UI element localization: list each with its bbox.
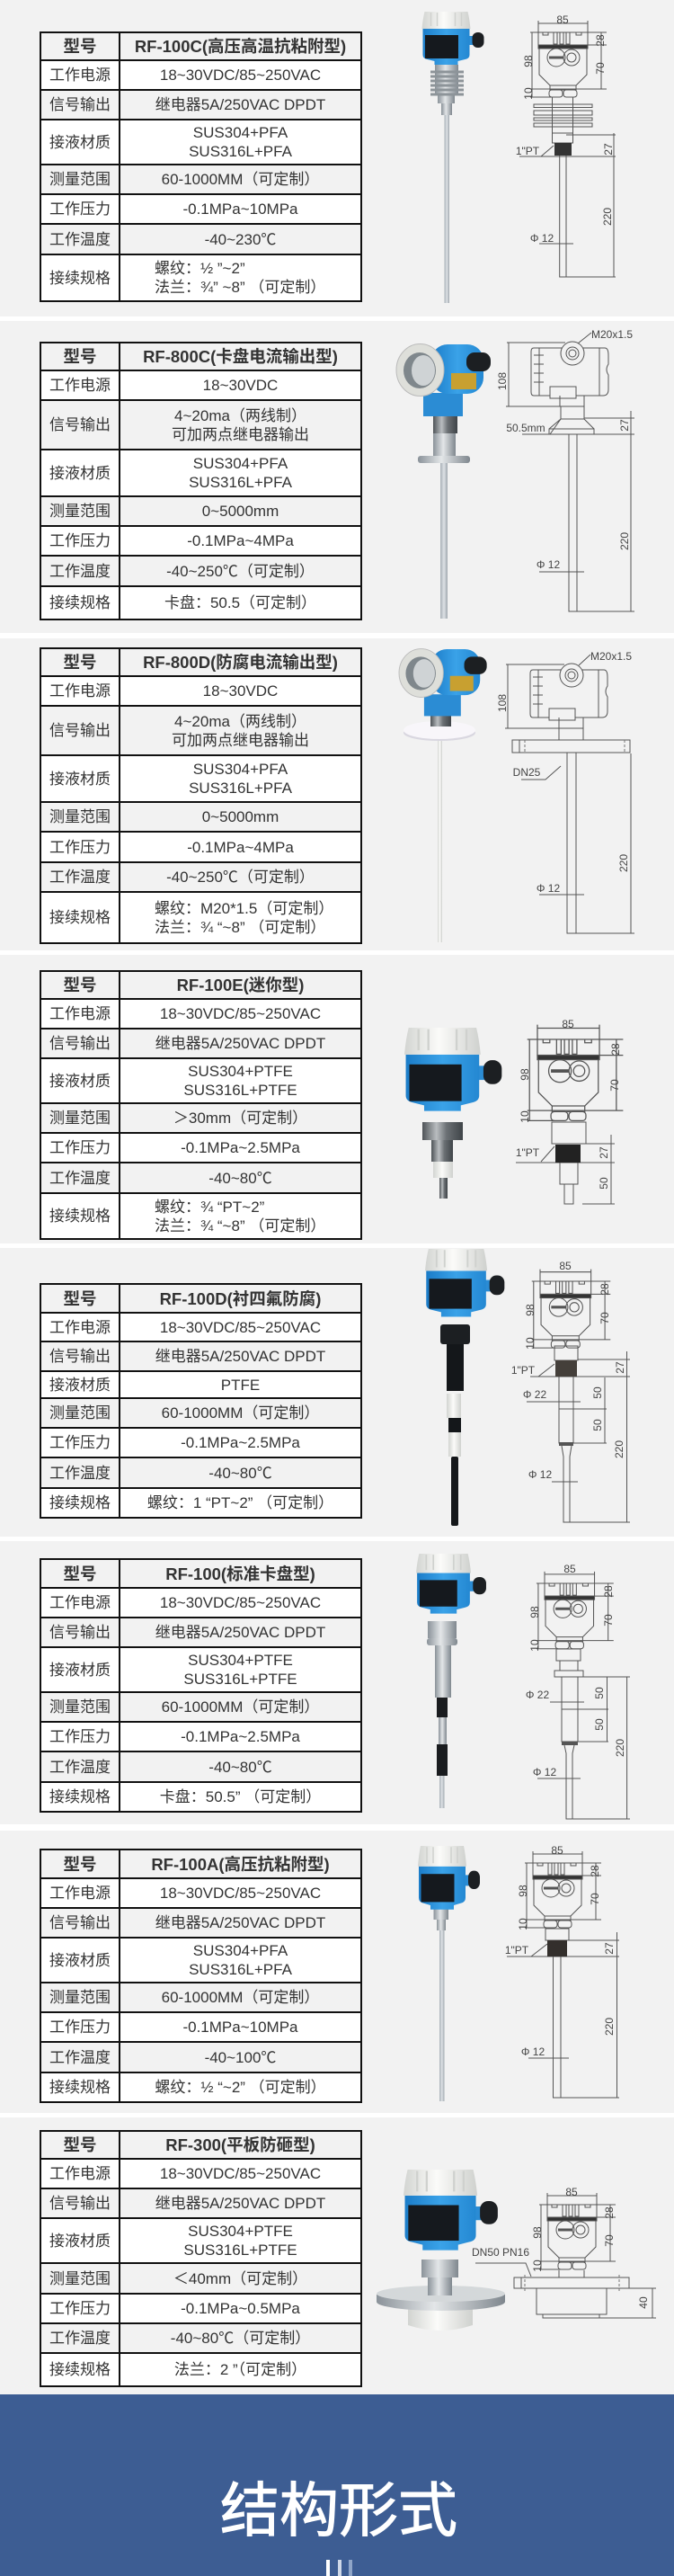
spec table: RF-300: SUS316L+PTFE — [183, 2242, 297, 2259]
spec table: RF-800C: -40~250℃（可定制） — [166, 563, 315, 579]
spec table: RF-800C: 测量范围 — [49, 503, 111, 520]
drawing: RF-100C dimensions: 27 — [602, 143, 615, 156]
spec table: RF-100A: -0.1MPa~10MPa — [182, 2019, 298, 2036]
spec table: RF-100E: 接液材质 — [49, 1072, 111, 1090]
spec table: RF-100C: RF-100C(高压高温抗粘附型) — [135, 37, 346, 56]
spec table: RF-100 — [40, 1558, 362, 1813]
drawing: RF-100A dimensions: 85 — [551, 1844, 563, 1857]
spec table: RF-800D: 工作电源 — [49, 682, 111, 700]
spec table: RF-800D: 螺纹：M20*1.5（可定制） — [155, 899, 333, 917]
photo: RF-800D probe — [399, 649, 487, 942]
drawing: RF-100E dimensions: 50 — [598, 1177, 610, 1190]
spec table: RF-100E: 接续规格 — [49, 1208, 111, 1225]
spec table: RF-800D: 型号 — [63, 653, 97, 672]
spec table: RF-100A: 螺纹：½ “~2” （可定制） — [155, 2079, 326, 2096]
drawing: RF-100D dimensions: 50 — [591, 1419, 604, 1431]
spec table: RF-800D: 4~20ma（两线制） — [174, 712, 306, 730]
drawing: RF-100E dimensions: 70 — [608, 1079, 621, 1092]
spec table: RF-100C: 测量范围 — [49, 171, 111, 188]
drawing: RF-100D dimensions: 1"PT — [511, 1364, 536, 1377]
spec table: RF-100D: 信号输出 — [49, 1348, 111, 1365]
spec table: RF-100C: 法兰：¾” ~8” （可定制） — [155, 279, 325, 296]
spec table: RF-100C: 螺纹：½ ”~2” — [155, 260, 245, 277]
spec table: RF-800C: 4~20ma（两线制） — [174, 406, 306, 424]
spec table: RF-100C: 60-1000MM（可定制） — [162, 171, 319, 188]
spec table: RF-300: 法兰：2 ”（可定制） — [174, 2361, 306, 2378]
photo: RF-100 probe — [416, 1554, 486, 1808]
spec table: RF-800D: 测量范围 — [49, 808, 111, 825]
spec table: RF-100E — [40, 970, 362, 1240]
spec table: RF-100E: 测量范围 — [49, 1110, 111, 1127]
photo: RF-100A probe — [418, 1846, 480, 2101]
spec table: RF-100C: 工作温度 — [49, 230, 111, 248]
spec table: RF-100: SUS316L+PTFE — [183, 1671, 297, 1688]
spec table: RF-100C: SUS304+PFA — [193, 124, 288, 141]
panel background: RF-100D — [0, 1248, 674, 1537]
panel background: RF-800D — [0, 638, 674, 950]
spec table: RF-300: 继电器5A/250VAC DPDT — [155, 2195, 325, 2212]
drawing: RF-100D dimensions: 220 — [613, 1440, 625, 1458]
drawing: RF-800C dimensions: 27 — [618, 419, 631, 432]
drawing: RF-300 dimensions: 70 — [603, 2234, 616, 2247]
drawing: RF-800D dimensions: M20x1.5 — [590, 650, 632, 663]
spec table: RF-800D: -0.1MPa~4MPa — [187, 838, 294, 856]
spec table: RF-300: 接液材质 — [49, 2232, 111, 2250]
spec table: RF-100D: 接续规格 — [49, 1494, 111, 1511]
drawing: RF-100C dimensions: 220 — [601, 208, 614, 226]
spec table: RF-800C: 工作温度 — [49, 563, 111, 579]
spec table: RF-100E: RF-100E(迷你型) — [177, 976, 304, 994]
drawing: RF-100 dimensions: 98 — [528, 1606, 541, 1618]
spec table: RF-100C: SUS316L+PFA — [189, 143, 292, 160]
spec table: RF-800C: 型号 — [63, 347, 97, 366]
spec table: RF-800D: 接续规格 — [49, 909, 111, 926]
spec table: RF-300: 测量范围 — [49, 2269, 111, 2287]
spec table: RF-100A: 继电器5A/250VAC DPDT — [155, 1914, 325, 1931]
spec table: RF-800C: RF-800C(卡盘电流输出型) — [143, 347, 338, 366]
spec table: RF-100: 工作压力 — [49, 1728, 111, 1745]
spec table: RF-800C: SUS316L+PFA — [189, 474, 292, 491]
spec table: RF-100D: 型号 — [63, 1289, 97, 1307]
spec table: RF-800D: 可加两点继电器输出 — [172, 732, 309, 748]
drawing: RF-100 dimensions: 50 — [593, 1687, 606, 1699]
panel background: RF-100 — [0, 1541, 674, 1824]
spec table: RF-100E: -40~80℃ — [208, 1169, 272, 1187]
spec table: RF-100C: 工作电源 — [49, 67, 111, 84]
spec table: RF-100: 工作温度 — [49, 1759, 111, 1775]
spec table: RF-100E: 工作压力 — [49, 1139, 111, 1156]
spec table: RF-800D: -40~250℃（可定制） — [166, 869, 315, 886]
spec table: RF-100A: 60-1000MM（可定制） — [162, 1989, 319, 2006]
spec table: RF-100: 型号 — [63, 1564, 97, 1582]
drawing: RF-100E dimensions: 28 — [609, 1043, 622, 1056]
spec table: RF-100: SUS304+PTFE — [188, 1652, 293, 1669]
spec table: RF-800C: 信号输出 — [49, 416, 111, 433]
banner heading: 结构形式 — [220, 2477, 457, 2544]
drawing: RF-100 dimensions: 50 — [593, 1718, 606, 1731]
spec table: RF-800D: 工作温度 — [49, 869, 111, 886]
spec table: RF-100A: 工作温度 — [49, 2048, 111, 2066]
panel background: RF-100C — [0, 0, 674, 316]
spec table: RF-100E: SUS316L+PTFE — [183, 1082, 297, 1099]
drawing: RF-100 dimensions: Φ 22 — [526, 1689, 549, 1701]
spec table: RF-300: 工作温度 — [49, 2330, 111, 2347]
spec table: RF-100E: 继电器5A/250VAC DPDT — [155, 1035, 325, 1052]
spec table: RF-800C — [40, 342, 362, 620]
spec table: RF-800D: SUS304+PFA — [193, 761, 288, 778]
spec table: RF-800C: 卡盘：50.5（可定制） — [164, 594, 316, 611]
spec table: RF-300: 18~30VDC/85~250VAC — [160, 2165, 321, 2182]
drawing: RF-100A dimensions: Φ 12 — [521, 2046, 545, 2058]
photo: RF-800C probe — [396, 343, 491, 619]
drawing: RF-100A dimensions: 220 — [603, 2018, 616, 2036]
spec table: RF-100A — [40, 1849, 362, 2103]
icon: three vertical bars — [326, 2560, 352, 2576]
panel background: RF-300 — [0, 2117, 674, 2394]
spec table: RF-800D: 信号输出 — [49, 722, 111, 739]
drawing: RF-800C dimensions: 220 — [618, 532, 631, 550]
spec table: RF-800D: RF-800D(防腐电流输出型) — [143, 653, 338, 672]
spec table: RF-100A: 接续规格 — [49, 2079, 111, 2096]
spec table: RF-100D: 接液材质 — [49, 1376, 111, 1394]
drawing: RF-100A dimensions: 98 — [517, 1885, 529, 1897]
spec table: RF-100E: 型号 — [63, 976, 97, 994]
spec table: RF-100D — [40, 1283, 362, 1519]
spec table: RF-100E: 工作温度 — [49, 1169, 111, 1187]
spec table: RF-100E: ＞30mm（可定制） — [173, 1110, 307, 1127]
drawing: RF-300 dimensions — [472, 2186, 656, 2318]
spec table: RF-100A: SUS316L+PFA — [189, 1961, 292, 1978]
drawing: RF-100D dimensions: 70 — [599, 1312, 611, 1324]
drawing: RF-100D dimensions: 98 — [524, 1304, 537, 1316]
spec table: RF-100D: 60-1000MM（可定制） — [162, 1404, 319, 1422]
spec table: RF-100A: 18~30VDC/85~250VAC — [160, 1885, 321, 1902]
spec table: RF-800C: -0.1MPa~4MPa — [187, 532, 294, 549]
drawing: RF-800D dimensions — [496, 650, 634, 933]
spec table: RF-100C: 18~30VDC/85~250VAC — [160, 67, 321, 84]
photo: RF-100C probe — [422, 12, 483, 303]
spec table: RF-100E: 螺纹：¾ “PT~2” — [155, 1198, 264, 1216]
spec table: RF-800D — [40, 647, 362, 944]
drawing: RF-800D dimensions: Φ 12 — [537, 882, 560, 895]
photo: RF-300 probe — [377, 2170, 505, 2331]
spec table: RF-100C: 信号输出 — [49, 96, 111, 113]
spec table: RF-100A: 型号 — [63, 1854, 97, 1874]
spec table: RF-300: -40~80℃（可定制） — [171, 2330, 310, 2347]
spec table: RF-300: 型号 — [63, 2135, 97, 2154]
drawing: RF-100C dimensions: 28 — [594, 34, 607, 47]
spec table: RF-100A: RF-100A(高压抗粘附型) — [151, 1854, 330, 1874]
spec table: RF-800D: SUS316L+PFA — [189, 780, 292, 797]
drawing: RF-800C dimensions: Φ 12 — [537, 558, 560, 571]
drawing: RF-100E dimensions: 98 — [519, 1068, 531, 1081]
spec table: RF-100C: -0.1MPa~10MPa — [182, 201, 298, 218]
drawing: RF-100A dimensions: 70 — [589, 1893, 601, 1905]
spec table: RF-300: RF-300(平板防砸型) — [165, 2135, 315, 2154]
drawing: RF-800C dimensions: 50.5mm — [506, 422, 545, 434]
drawing: RF-800D dimensions: 108 — [496, 694, 509, 712]
spec table: RF-100E: SUS304+PTFE — [188, 1063, 293, 1080]
drawing: RF-100A dimensions: 10 — [517, 1918, 529, 1930]
spec table: RF-100D: 测量范围 — [49, 1404, 111, 1422]
spec table: RF-800C: 工作电源 — [49, 377, 111, 394]
spec table: RF-300: -0.1MPa~0.5MPa — [181, 2300, 300, 2317]
panel background: RF-100A — [0, 1831, 674, 2113]
drawing: RF-100 dimensions: 85 — [563, 1563, 576, 1575]
spec table: RF-100C: 接液材质 — [49, 133, 111, 151]
drawing: RF-100A dimensions: 27 — [603, 1942, 616, 1955]
spec table: RF-300: 接续规格 — [49, 2361, 111, 2378]
drawing: RF-100D dimensions: 50 — [591, 1386, 604, 1399]
spec table: RF-800D: 接液材质 — [49, 770, 111, 788]
section banner background — [0, 2394, 674, 2576]
drawing: RF-800C dimensions: 108 — [496, 372, 509, 390]
spec table: RF-100: 工作电源 — [49, 1594, 111, 1611]
spec table: RF-100E: 工作电源 — [49, 1005, 111, 1022]
spec table: RF-100C: 接续规格 — [49, 270, 111, 286]
drawing: RF-100 dimensions: 70 — [602, 1614, 615, 1627]
drawing: RF-100C dimensions: 1"PT — [516, 145, 540, 157]
drawing: RF-100C dimensions: 10 — [522, 87, 535, 100]
drawing: RF-100 dimensions: Φ 12 — [533, 1766, 556, 1778]
spec table: RF-100: 卡盘：50.5” （可定制） — [160, 1788, 321, 1805]
spec table: RF-100C: 继电器5A/250VAC DPDT — [155, 96, 325, 113]
spec table: RF-100D: -40~80℃ — [208, 1464, 272, 1482]
panel background: RF-100E — [0, 955, 674, 1243]
spec table: RF-800C: 工作压力 — [49, 532, 111, 549]
spec table: RF-100D: 继电器5A/250VAC DPDT — [155, 1348, 325, 1365]
spec table: RF-100E: 法兰：¾ “~8” （可定制） — [155, 1217, 325, 1234]
spec table: RF-300: 工作压力 — [49, 2300, 111, 2317]
spec table: RF-100A: 测量范围 — [49, 1989, 111, 2006]
photo: RF-100E probe — [404, 1028, 501, 1199]
spec table: RF-100: RF-100(标准卡盘型) — [165, 1564, 315, 1582]
spec table: RF-300: SUS304+PTFE — [188, 2223, 293, 2240]
spec table: RF-100: 测量范围 — [49, 1698, 111, 1716]
drawing: RF-100D dimensions: Φ 22 — [523, 1388, 546, 1401]
spec table: RF-100A: SUS304+PFA — [193, 1942, 288, 1959]
spec table: RF-800D: 18~30VDC — [203, 682, 278, 700]
photo: RF-100D probe — [425, 1249, 504, 1526]
drawing: RF-100E dimensions: 10 — [519, 1110, 531, 1123]
spec table: RF-300: 工作电源 — [49, 2165, 111, 2182]
spec table: RF-100C: 型号 — [63, 37, 97, 56]
drawing: RF-100E dimensions: 85 — [562, 1018, 574, 1030]
spec table: RF-800D: 工作压力 — [49, 838, 111, 856]
spec table: RF-100: -40~80℃ — [208, 1759, 272, 1775]
drawing: RF-300 dimensions: 40 — [637, 2296, 650, 2309]
spec table: RF-300 — [40, 2130, 362, 2387]
spec table: RF-100D: 18~30VDC/85~250VAC — [160, 1318, 321, 1336]
drawing: RF-100C dimensions: Φ 12 — [530, 232, 554, 245]
drawing: RF-100 dimensions: 10 — [528, 1639, 541, 1652]
spec table: RF-800C: 接续规格 — [49, 594, 111, 611]
spec table: RF-100A: 接液材质 — [49, 1951, 111, 1969]
spec table: RF-100E: 18~30VDC/85~250VAC — [160, 1005, 321, 1022]
spec table: RF-100: 信号输出 — [49, 1624, 111, 1641]
spec table: RF-800C: SUS304+PFA — [193, 455, 288, 472]
panel background: RF-800C — [0, 321, 674, 633]
drawing: RF-100C dimensions: 98 — [522, 55, 535, 67]
drawing: RF-800D dimensions: DN25 — [513, 766, 541, 779]
drawing: RF-100C dimensions: 70 — [594, 62, 607, 75]
spec table: RF-800C: 接液材质 — [49, 464, 111, 482]
drawing: RF-300 dimensions: DN50 PN16 — [472, 2246, 529, 2259]
spec table: RF-100: 18~30VDC/85~250VAC — [160, 1594, 321, 1611]
spec table: RF-800C: 0~5000mm — [202, 503, 279, 520]
spec table: RF-100D: 工作压力 — [49, 1434, 111, 1451]
spec table: RF-100: 继电器5A/250VAC DPDT — [155, 1624, 325, 1641]
drawing: RF-300 dimensions: 98 — [531, 2226, 544, 2239]
spec table: RF-800D: 法兰：¾ “~8” （可定制） — [155, 919, 325, 935]
drawing: RF-100E dimensions — [516, 1018, 623, 1204]
spec table: RF-300: ＜40mm（可定制） — [173, 2269, 307, 2287]
spec table: RF-100D: PTFE — [221, 1376, 260, 1394]
drawing: RF-800C dimensions: M20x1.5 — [591, 328, 633, 341]
spec table: RF-100: 接液材质 — [49, 1662, 111, 1678]
drawing: RF-100D dimensions — [511, 1260, 630, 1522]
spec table: RF-100A: 工作电源 — [49, 1885, 111, 1902]
drawing: RF-100D dimensions: 85 — [559, 1260, 572, 1272]
drawing: RF-100D dimensions: Φ 12 — [528, 1468, 552, 1481]
drawing: RF-100D dimensions: 27 — [614, 1361, 626, 1374]
spec table: RF-800C: 18~30VDC — [203, 377, 278, 394]
spec table: RF-800D: 0~5000mm — [202, 808, 279, 825]
drawing: RF-100 dimensions: 220 — [614, 1739, 626, 1757]
spec table: RF-100C: 工作压力 — [49, 201, 111, 218]
spec table: RF-100E: 信号输出 — [49, 1035, 111, 1052]
drawing: RF-100C dimensions: 85 — [556, 13, 569, 26]
spec table: RF-100A: -40~100℃ — [205, 2048, 276, 2066]
spec table: RF-100: -0.1MPa~2.5MPa — [181, 1728, 300, 1745]
drawing: RF-100C dimensions — [516, 13, 616, 277]
drawing: RF-100 dimensions — [526, 1563, 630, 1819]
drawing: RF-100 dimensions: 28 — [602, 1585, 615, 1598]
cooling fins — [430, 65, 464, 95]
spec table: RF-100C: -40~230℃ — [205, 230, 276, 248]
spec table: RF-100C — [40, 31, 362, 302]
drawing: RF-100E dimensions: 1"PT — [516, 1146, 540, 1159]
spec table: RF-100D: 工作温度 — [49, 1464, 111, 1482]
spec table: RF-100D: 工作电源 — [49, 1318, 111, 1336]
drawing: RF-800D dimensions: 220 — [617, 854, 630, 872]
spec table: RF-100: 60-1000MM（可定制） — [162, 1698, 319, 1716]
spec table: RF-800C: 可加两点继电器输出 — [172, 426, 309, 442]
drawing: RF-100E dimensions: 27 — [598, 1146, 610, 1159]
drawing: RF-300 dimensions: 28 — [603, 2206, 616, 2219]
spec table: RF-100D: -0.1MPa~2.5MPa — [181, 1434, 300, 1451]
spec table: RF-100E: -0.1MPa~2.5MPa — [181, 1139, 300, 1156]
drawing: RF-100A dimensions: 28 — [589, 1865, 601, 1877]
spec table: RF-100D: 螺纹：1 “PT~2” （可定制） — [147, 1494, 333, 1511]
spec table: RF-100D: RF-100D(衬四氟防腐) — [160, 1289, 321, 1307]
drawing: RF-300 dimensions: 85 — [565, 2186, 578, 2198]
drawing: RF-100D dimensions: 28 — [599, 1283, 611, 1296]
spec table: RF-100A: 工作压力 — [49, 2019, 111, 2036]
drawing: RF-100A dimensions: 1"PT — [505, 1944, 529, 1957]
spec table: RF-100A: 信号输出 — [49, 1914, 111, 1931]
drawing: RF-300 dimensions: 10 — [531, 2260, 544, 2272]
drawing: RF-100D dimensions: 10 — [524, 1337, 537, 1350]
spec table: RF-100: 接续规格 — [49, 1788, 111, 1805]
spec table: RF-300: 信号输出 — [49, 2195, 111, 2212]
drawing: RF-100A dimensions — [505, 1844, 619, 2098]
drawing: RF-800C dimensions — [496, 328, 634, 611]
